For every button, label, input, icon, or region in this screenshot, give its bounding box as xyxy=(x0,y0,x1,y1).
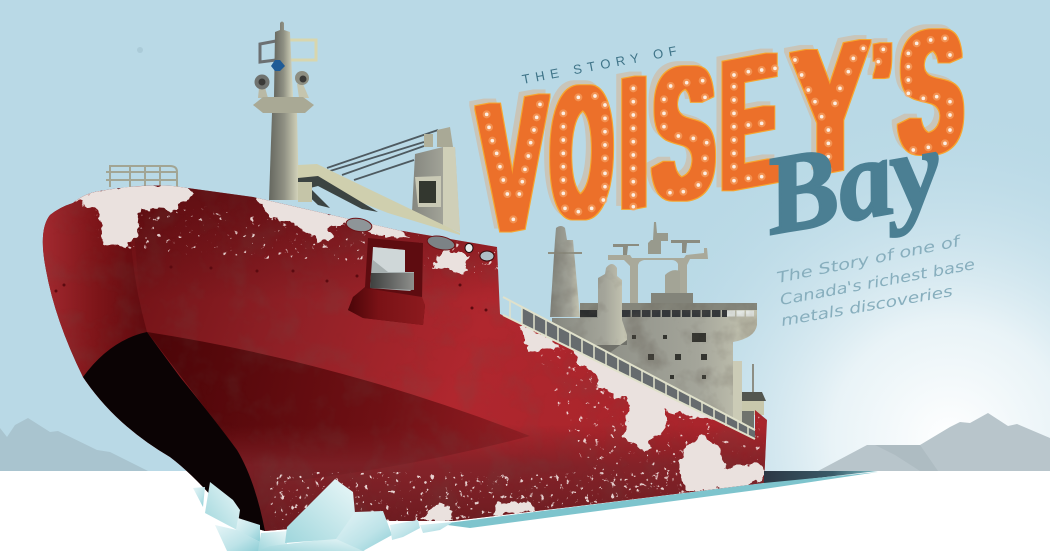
bow railing xyxy=(106,166,177,187)
title: Voisey's marquee lettering: O xyxy=(552,44,611,262)
mast lower post xyxy=(269,113,299,200)
signal lamps xyxy=(254,71,309,98)
deck railing xyxy=(503,297,755,439)
title: Voisey's marquee lettering: Y xyxy=(793,2,867,215)
title: Voisey's marquee lettering: E xyxy=(717,11,772,226)
dark waterline wedge xyxy=(764,471,878,484)
aft funnel tower right xyxy=(552,264,627,360)
foremast xyxy=(253,22,316,200)
floe right xyxy=(390,520,420,540)
title: Voisey's marquee lettering: V xyxy=(480,55,545,275)
tagline xyxy=(775,231,976,330)
floe tall left xyxy=(205,482,240,530)
hull rivets xyxy=(54,266,488,312)
hull base xyxy=(43,186,767,531)
floe base-centre xyxy=(258,538,365,551)
grime on superstructure xyxy=(550,243,757,412)
title: Voisey's marquee lettering: S xyxy=(654,25,714,244)
title: Voisey's marquee lettering: S xyxy=(649,21,709,240)
crane cables xyxy=(327,130,438,180)
title: Voisey's marquee lettering: I xyxy=(616,33,642,245)
floe base-left xyxy=(258,531,287,551)
title: Voisey's marquee lettering: ’ xyxy=(875,19,890,147)
snow ground xyxy=(0,471,1050,551)
deck crane xyxy=(298,127,460,235)
snow patches on hull xyxy=(73,183,763,522)
floe right of centre xyxy=(336,511,392,551)
blue beacon xyxy=(271,60,285,71)
marquee bulbs xyxy=(487,38,950,219)
floe far right xyxy=(420,522,453,533)
ice strip along waterline xyxy=(440,472,878,528)
mast platform xyxy=(253,97,314,113)
title: Voisey's marquee lettering: V xyxy=(474,51,540,271)
ship hull xyxy=(30,180,780,540)
title: Voisey's marquee lettering: E xyxy=(722,15,777,230)
title: Voisey's marquee lettering: S xyxy=(654,25,714,244)
title: Voisey's marquee lettering: ’ xyxy=(870,15,885,143)
left mountains xyxy=(0,418,148,471)
kicker: the story of: THE STORY OF xyxy=(521,42,683,87)
main bridge block xyxy=(560,303,757,425)
floe small left xyxy=(193,487,205,507)
anchor pocket xyxy=(348,238,425,325)
radar mast xyxy=(608,222,708,303)
crane tower xyxy=(412,127,460,232)
title: Voisey's marquee lettering: V xyxy=(480,55,545,275)
title: Voisey's marquee lettering: O xyxy=(552,44,611,262)
mast upper post xyxy=(274,22,293,97)
title: Voisey's marquee lettering xyxy=(474,0,962,276)
mast rear railing frames xyxy=(260,40,316,62)
floe lower-left xyxy=(215,525,262,551)
stem black shadow xyxy=(83,332,265,531)
title: Voisey's marquee lettering: I xyxy=(621,37,647,249)
aft superstructure xyxy=(548,222,770,440)
title: Voisey's marquee lettering: I xyxy=(621,37,647,249)
hull shading xyxy=(30,180,780,540)
title: Voisey's marquee lettering: Y xyxy=(793,2,867,215)
funnel dome and base xyxy=(651,270,693,303)
crane jib frame xyxy=(298,164,460,235)
tagline: The Story of one of xyxy=(775,231,965,287)
title: Voisey's marquee lettering: ’ xyxy=(875,19,890,147)
stern deck house xyxy=(733,361,766,431)
tagline: Canada's richest base xyxy=(778,255,976,309)
ice floes xyxy=(193,479,453,551)
snow bank below hull xyxy=(400,472,1050,551)
right mountains xyxy=(818,413,1050,471)
tagline: metals discoveries xyxy=(780,282,954,330)
aft funnel tower left xyxy=(548,226,582,317)
floe centre-left xyxy=(236,518,260,542)
flaking paint specks xyxy=(90,190,770,532)
title: Bay script: Bay xyxy=(753,106,951,259)
bridge windows xyxy=(580,310,755,379)
floe large centre xyxy=(285,479,355,543)
title: Voisey's marquee lettering: E xyxy=(722,15,777,230)
title: Voisey's marquee lettering: Y xyxy=(788,0,862,211)
title: Voisey's marquee lettering: O xyxy=(547,40,606,258)
hawse pipe ports xyxy=(345,216,494,261)
